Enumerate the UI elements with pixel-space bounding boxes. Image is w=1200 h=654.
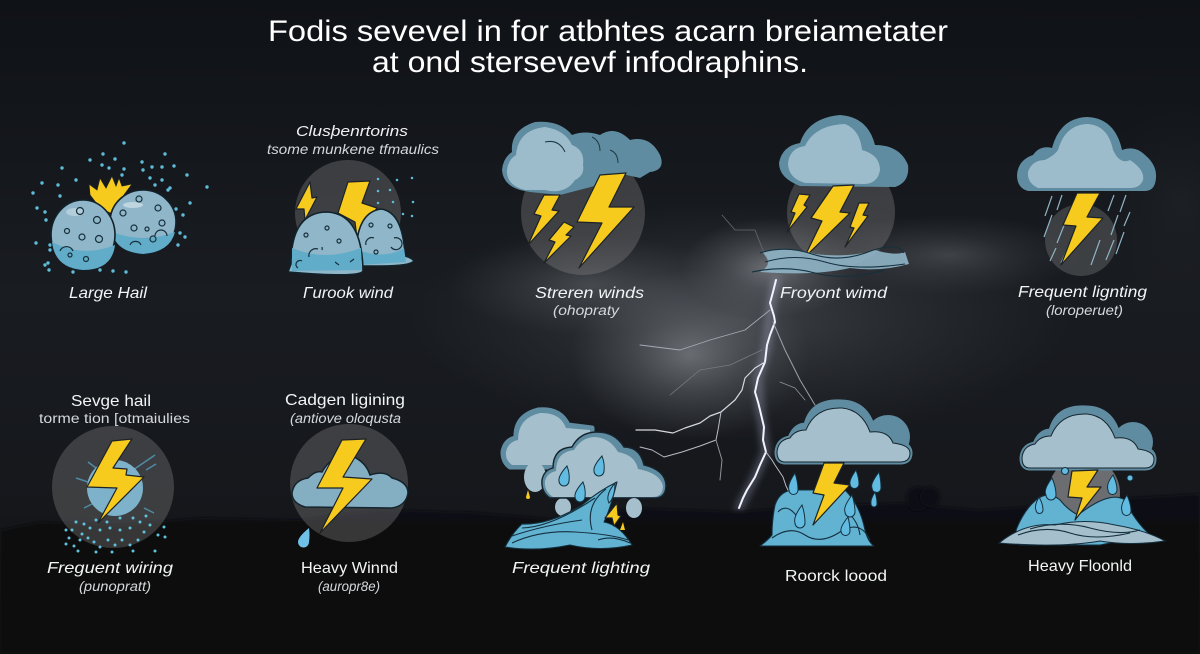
icon: large hail bbox=[33, 143, 207, 272]
halo disc bbox=[1048, 457, 1120, 529]
lightning bolt bbox=[1068, 470, 1101, 520]
label: Frequent lignting: (loroperuet) bbox=[1046, 303, 1123, 318]
label: Streren winds: (ohopraty bbox=[553, 303, 620, 318]
back cloud bbox=[503, 410, 592, 516]
background lightning bolt bbox=[636, 215, 815, 508]
right hailstone bbox=[110, 190, 176, 254]
halo disc bbox=[290, 424, 408, 542]
label: Froyont wimd: Froyont wimd bbox=[780, 285, 888, 302]
hail dots bbox=[66, 516, 165, 552]
label: Freguent wiring: (punopratt) bbox=[79, 579, 151, 594]
label: Heavy Floonld: Heavy Floonld bbox=[1028, 558, 1132, 575]
lightning bolt small bbox=[605, 503, 621, 526]
lightning bolts bbox=[296, 181, 377, 238]
storm cloud bbox=[502, 122, 662, 195]
lightning bolts bbox=[528, 173, 634, 268]
title: at ond stersevevf infodraphins. bbox=[372, 46, 808, 79]
lightning bolt bbox=[87, 439, 144, 523]
title: Fodis sevevel in for atbhtes acarn breiametater bbox=[268, 15, 948, 48]
icon: hail with lightning bbox=[288, 160, 414, 275]
flood water bbox=[760, 490, 874, 546]
left hailstone bbox=[51, 200, 115, 270]
rain drops bbox=[1035, 468, 1133, 516]
label: Frequent lighting: Frequent lighting bbox=[512, 560, 650, 577]
halo disc bbox=[295, 160, 401, 266]
icon: lightning over hail ball bbox=[52, 426, 174, 552]
hail spray dots bbox=[33, 143, 207, 272]
storm cloud bbox=[292, 456, 408, 508]
text block: second row heading: (antiove oloqusta bbox=[290, 411, 402, 426]
yellow starburst bbox=[89, 176, 132, 214]
icon: cloud with lightning and wind waves bbox=[752, 115, 909, 276]
wind waves bbox=[752, 247, 909, 276]
icon: lightning over small cloud bbox=[290, 424, 408, 548]
rain drops on cloud bbox=[559, 456, 604, 502]
rain drop bbox=[298, 528, 310, 548]
text block: severe hail heading: torme tion [otmaiulies bbox=[39, 411, 190, 426]
halo disc bbox=[787, 158, 895, 266]
halo disc bbox=[52, 426, 174, 548]
storm cloud bbox=[1017, 117, 1156, 191]
wind streaks bbox=[76, 455, 156, 513]
label: Frequent lignting bbox=[1018, 284, 1147, 318]
icon: two clouds over wave bbox=[503, 410, 666, 549]
label: Heavy Winnd: (auropr8e) bbox=[318, 579, 380, 594]
flood water bbox=[999, 495, 1165, 545]
halo disc bbox=[521, 151, 645, 275]
icon: cloud over flood with lightning bbox=[999, 408, 1165, 545]
text block: second column heading: Clusþenrtorins bbox=[296, 123, 409, 140]
label: Streren winds bbox=[535, 285, 644, 318]
rain drops bbox=[789, 470, 881, 536]
text block: severe hail heading: Sevge hail bbox=[71, 393, 151, 410]
text block: second column heading bbox=[267, 123, 439, 157]
left hailstone bbox=[288, 212, 363, 275]
lightning bolt bbox=[1061, 193, 1103, 265]
text block: second column heading: tsome munkene tfmaulics bbox=[267, 142, 439, 157]
background: dark ground silhouette bbox=[0, 487, 1200, 654]
text block: second row heading bbox=[285, 392, 405, 426]
label: Large Hail: Large Hail bbox=[69, 285, 147, 302]
icon: cloud with lightning over flood bbox=[760, 402, 910, 546]
label: Turook wind: Γurook wind bbox=[303, 285, 394, 302]
hail ball bbox=[87, 460, 143, 516]
rain streaks bbox=[1044, 195, 1130, 265]
label: Streren winds: Streren winds bbox=[535, 285, 644, 302]
storm cloud bbox=[777, 402, 910, 462]
label: Freguent wiring: Freguent wiring bbox=[47, 560, 173, 577]
label: Heavy Winnd: Heavy Winnd bbox=[301, 560, 398, 577]
label: Heavy Winnd bbox=[301, 560, 398, 594]
lightning bolt bbox=[317, 439, 372, 533]
yellow drops bbox=[526, 490, 625, 530]
label: Roorck loood: Roorck loood bbox=[785, 568, 887, 585]
text block: second row heading: Cadgen ligining bbox=[285, 392, 405, 409]
storm cloud bbox=[779, 115, 908, 187]
lightning bolt bbox=[813, 463, 850, 525]
label: Frequent lignting: Frequent lignting bbox=[1018, 284, 1147, 301]
storm cloud bbox=[1022, 408, 1154, 468]
right hailstone bbox=[356, 209, 414, 266]
icon: cloud with lightning and rain bbox=[1017, 117, 1156, 276]
lightning bolts bbox=[787, 185, 869, 258]
front cloud bbox=[542, 432, 666, 518]
icon: cloud with three lightning bolts bbox=[502, 122, 662, 275]
title bbox=[268, 15, 948, 79]
water wave bbox=[505, 482, 632, 549]
label: Freguent wiring bbox=[47, 560, 173, 594]
text block: severe hail heading bbox=[39, 393, 190, 426]
halo disc bbox=[1045, 204, 1117, 276]
